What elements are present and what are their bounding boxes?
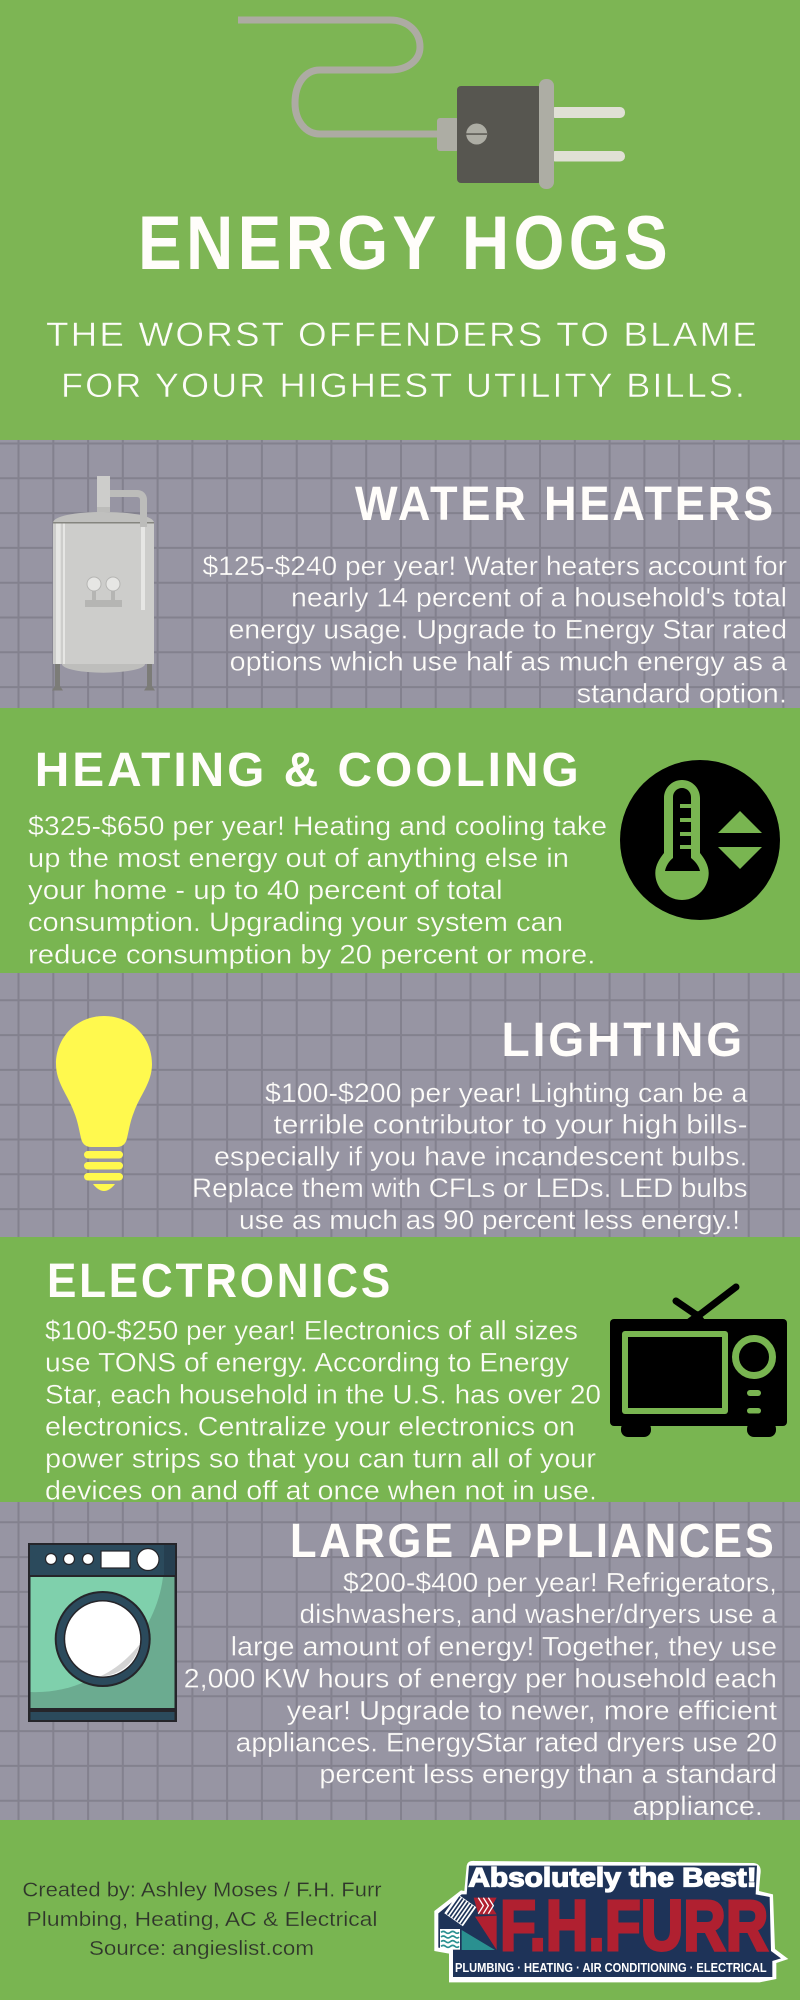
text: electronics body: $100-$250 per year! Electronics of all sizes (45, 1316, 578, 1346)
text: large appliances body: year! Upgrade to newer, more efficient (287, 1695, 778, 1725)
icon: washing machine (28, 1543, 177, 1722)
text: lighting body: especially if you have incandescent bulbs. (214, 1142, 748, 1172)
panel: heating and cooling (0, 708, 800, 973)
text: water heaters body: options which use half as much energy as a (230, 647, 787, 677)
icon: light bulb (56, 1016, 152, 1191)
subtitle: FOR YOUR HIGHEST UTILITY BILLS. (61, 367, 747, 405)
heading: lighting: LIGHTING (502, 1014, 745, 1067)
text: credits: Created by: Ashley Moses / F.H. Furr (22, 1880, 382, 1902)
text: lighting body: use as much as 90 percent less energy.! (239, 1205, 740, 1235)
text: credits (22, 1880, 382, 1960)
text: large appliances body: $200-$400 per year! Refrigerators, (343, 1568, 777, 1598)
logo tagline: Absolutely the Best! (468, 1863, 757, 1893)
text: electronics body: Star, each household in the U.S. has over 20 (45, 1380, 601, 1410)
text: lighting body (192, 1078, 748, 1235)
subtitle: THE WORST OFFENDERS TO BLAME (46, 316, 759, 354)
header panel (0, 0, 800, 440)
text: large appliances body: percent less energy than a standard (319, 1759, 777, 1789)
text: water heaters body (202, 551, 787, 709)
text: heating and cooling body (28, 811, 607, 969)
title: ENERGY HOGS (138, 201, 672, 286)
text: large appliances body: dishwashers, and washer/dryers use a (300, 1599, 777, 1629)
logo: F.H. Furr (434, 1861, 788, 1982)
icon: television (610, 1287, 787, 1437)
text: electronics body: power strips so that you can turn all of your (45, 1444, 596, 1474)
text: water heaters body: energy usage. Upgrade to Energy Star rated (229, 615, 787, 645)
heading: electronics: ELECTRONICS (47, 1255, 393, 1308)
text: electronics body (45, 1316, 601, 1506)
text: water heaters body: standard option. (576, 679, 787, 709)
text: credits: Plumbing, Heating, AC & Electrical (26, 1909, 378, 1931)
panel: lighting (0, 973, 800, 1237)
panel: large appliances (0, 1502, 800, 1821)
text: large appliances body (184, 1568, 778, 1821)
text: large appliances body: appliance. (633, 1791, 763, 1821)
icon: electric plug (238, 20, 625, 189)
text: large appliances body: appliances. EnergyStar rated dryers use 20 (236, 1728, 777, 1758)
text: electronics body: electronics. Centralize your electronics on (45, 1412, 575, 1442)
text: water heaters body: $125-$240 per year! Water heaters account for (202, 551, 787, 581)
text: lighting body: terrible contributor to your high bills- (274, 1110, 748, 1140)
text: lighting body: $100-$200 per year! Lighting can be a (265, 1078, 748, 1108)
text: credits: Source: angieslist.com (89, 1938, 314, 1960)
text: heating and cooling body: up the most energy out of anything else in (28, 843, 569, 873)
text: large appliances body: large amount of energy! Together, they use (231, 1632, 777, 1662)
text: heating and cooling body: your home - up to 40 percent of total (28, 875, 503, 905)
text: heating and cooling body: reduce consumption by 20 percent or more. (28, 939, 595, 969)
heading: heating and cooling: HEATING & COOLING (35, 744, 582, 797)
text: large appliances body: 2,000 KW hours of energy per household each (184, 1664, 777, 1694)
panel: electronics (0, 1237, 800, 1506)
panel: water heaters (0, 440, 800, 709)
footer panel (0, 1820, 800, 2000)
text: lighting body: Replace them with CFLs or LEDs. LED bulbs (192, 1173, 748, 1203)
logo emblem (440, 1894, 497, 1950)
text: heating and cooling body: $325-$650 per year! Heating and cooling take (28, 811, 607, 841)
text: water heaters body: nearly 14 percent of a household's total (291, 583, 787, 613)
text: electronics body: devices on and off at once when not in use. (45, 1476, 597, 1506)
icon: water heater (52, 476, 155, 690)
heading: water heaters: WATER HEATERS (355, 478, 776, 531)
icon: thermometer (620, 760, 780, 920)
text: electronics body: use TONS of energy. According to Energy (45, 1348, 570, 1378)
subtitle (46, 316, 759, 405)
text: heating and cooling body: consumption. Upgrading your system can (28, 907, 563, 937)
